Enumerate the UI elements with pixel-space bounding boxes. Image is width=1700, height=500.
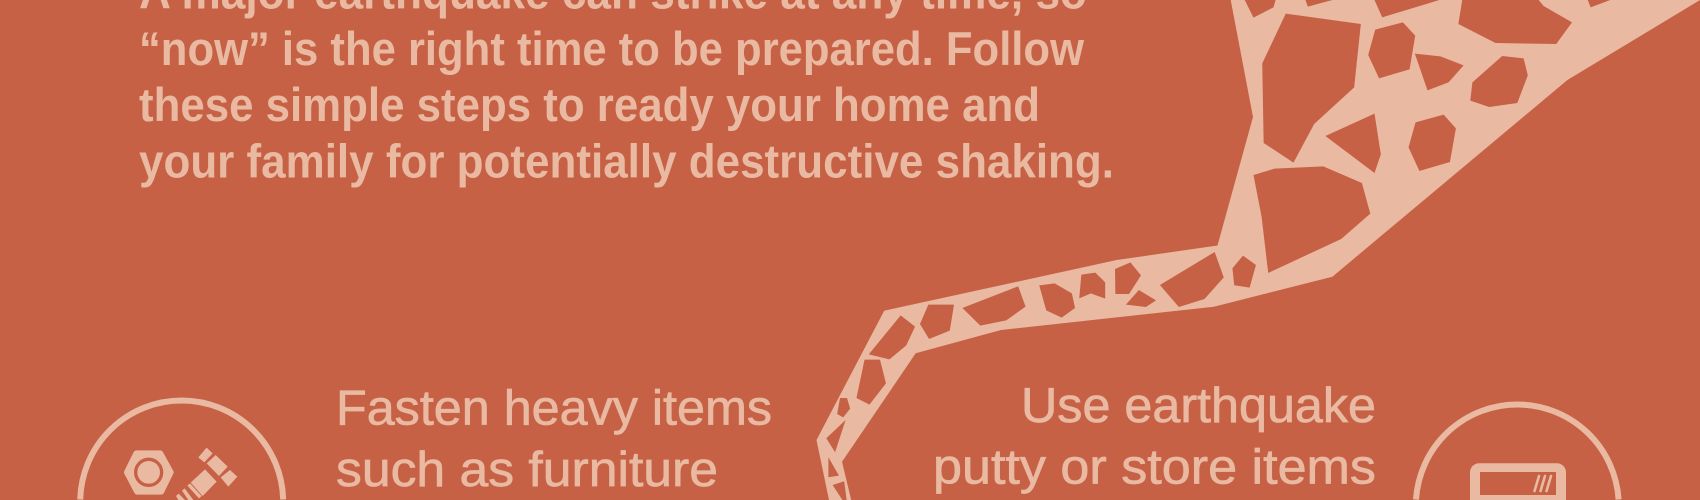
icon: putty container in circle — [1416, 405, 1619, 500]
step text: fasten heavy items: Fasten heavy items — [336, 381, 772, 435]
intro text block: “now” is the right time to be prepared. Follow — [139, 22, 1084, 75]
illustration: earthquake crack — [816, 0, 1700, 500]
step text: earthquake putty — [933, 379, 1376, 494]
icon: nut and bolt in circle — [80, 401, 283, 500]
intro text block: your family for potentially destructive shaking. — [139, 134, 1114, 188]
step text: earthquake putty: putty or store items — [933, 440, 1376, 494]
intro text block: these simple steps to ready your home and — [139, 78, 1040, 131]
intro text block — [139, 0, 1114, 188]
step text: fasten heavy items — [336, 381, 772, 497]
step text: earthquake putty: Use earthquake — [1021, 379, 1376, 433]
step text: fasten heavy items: such as furniture — [336, 443, 718, 497]
